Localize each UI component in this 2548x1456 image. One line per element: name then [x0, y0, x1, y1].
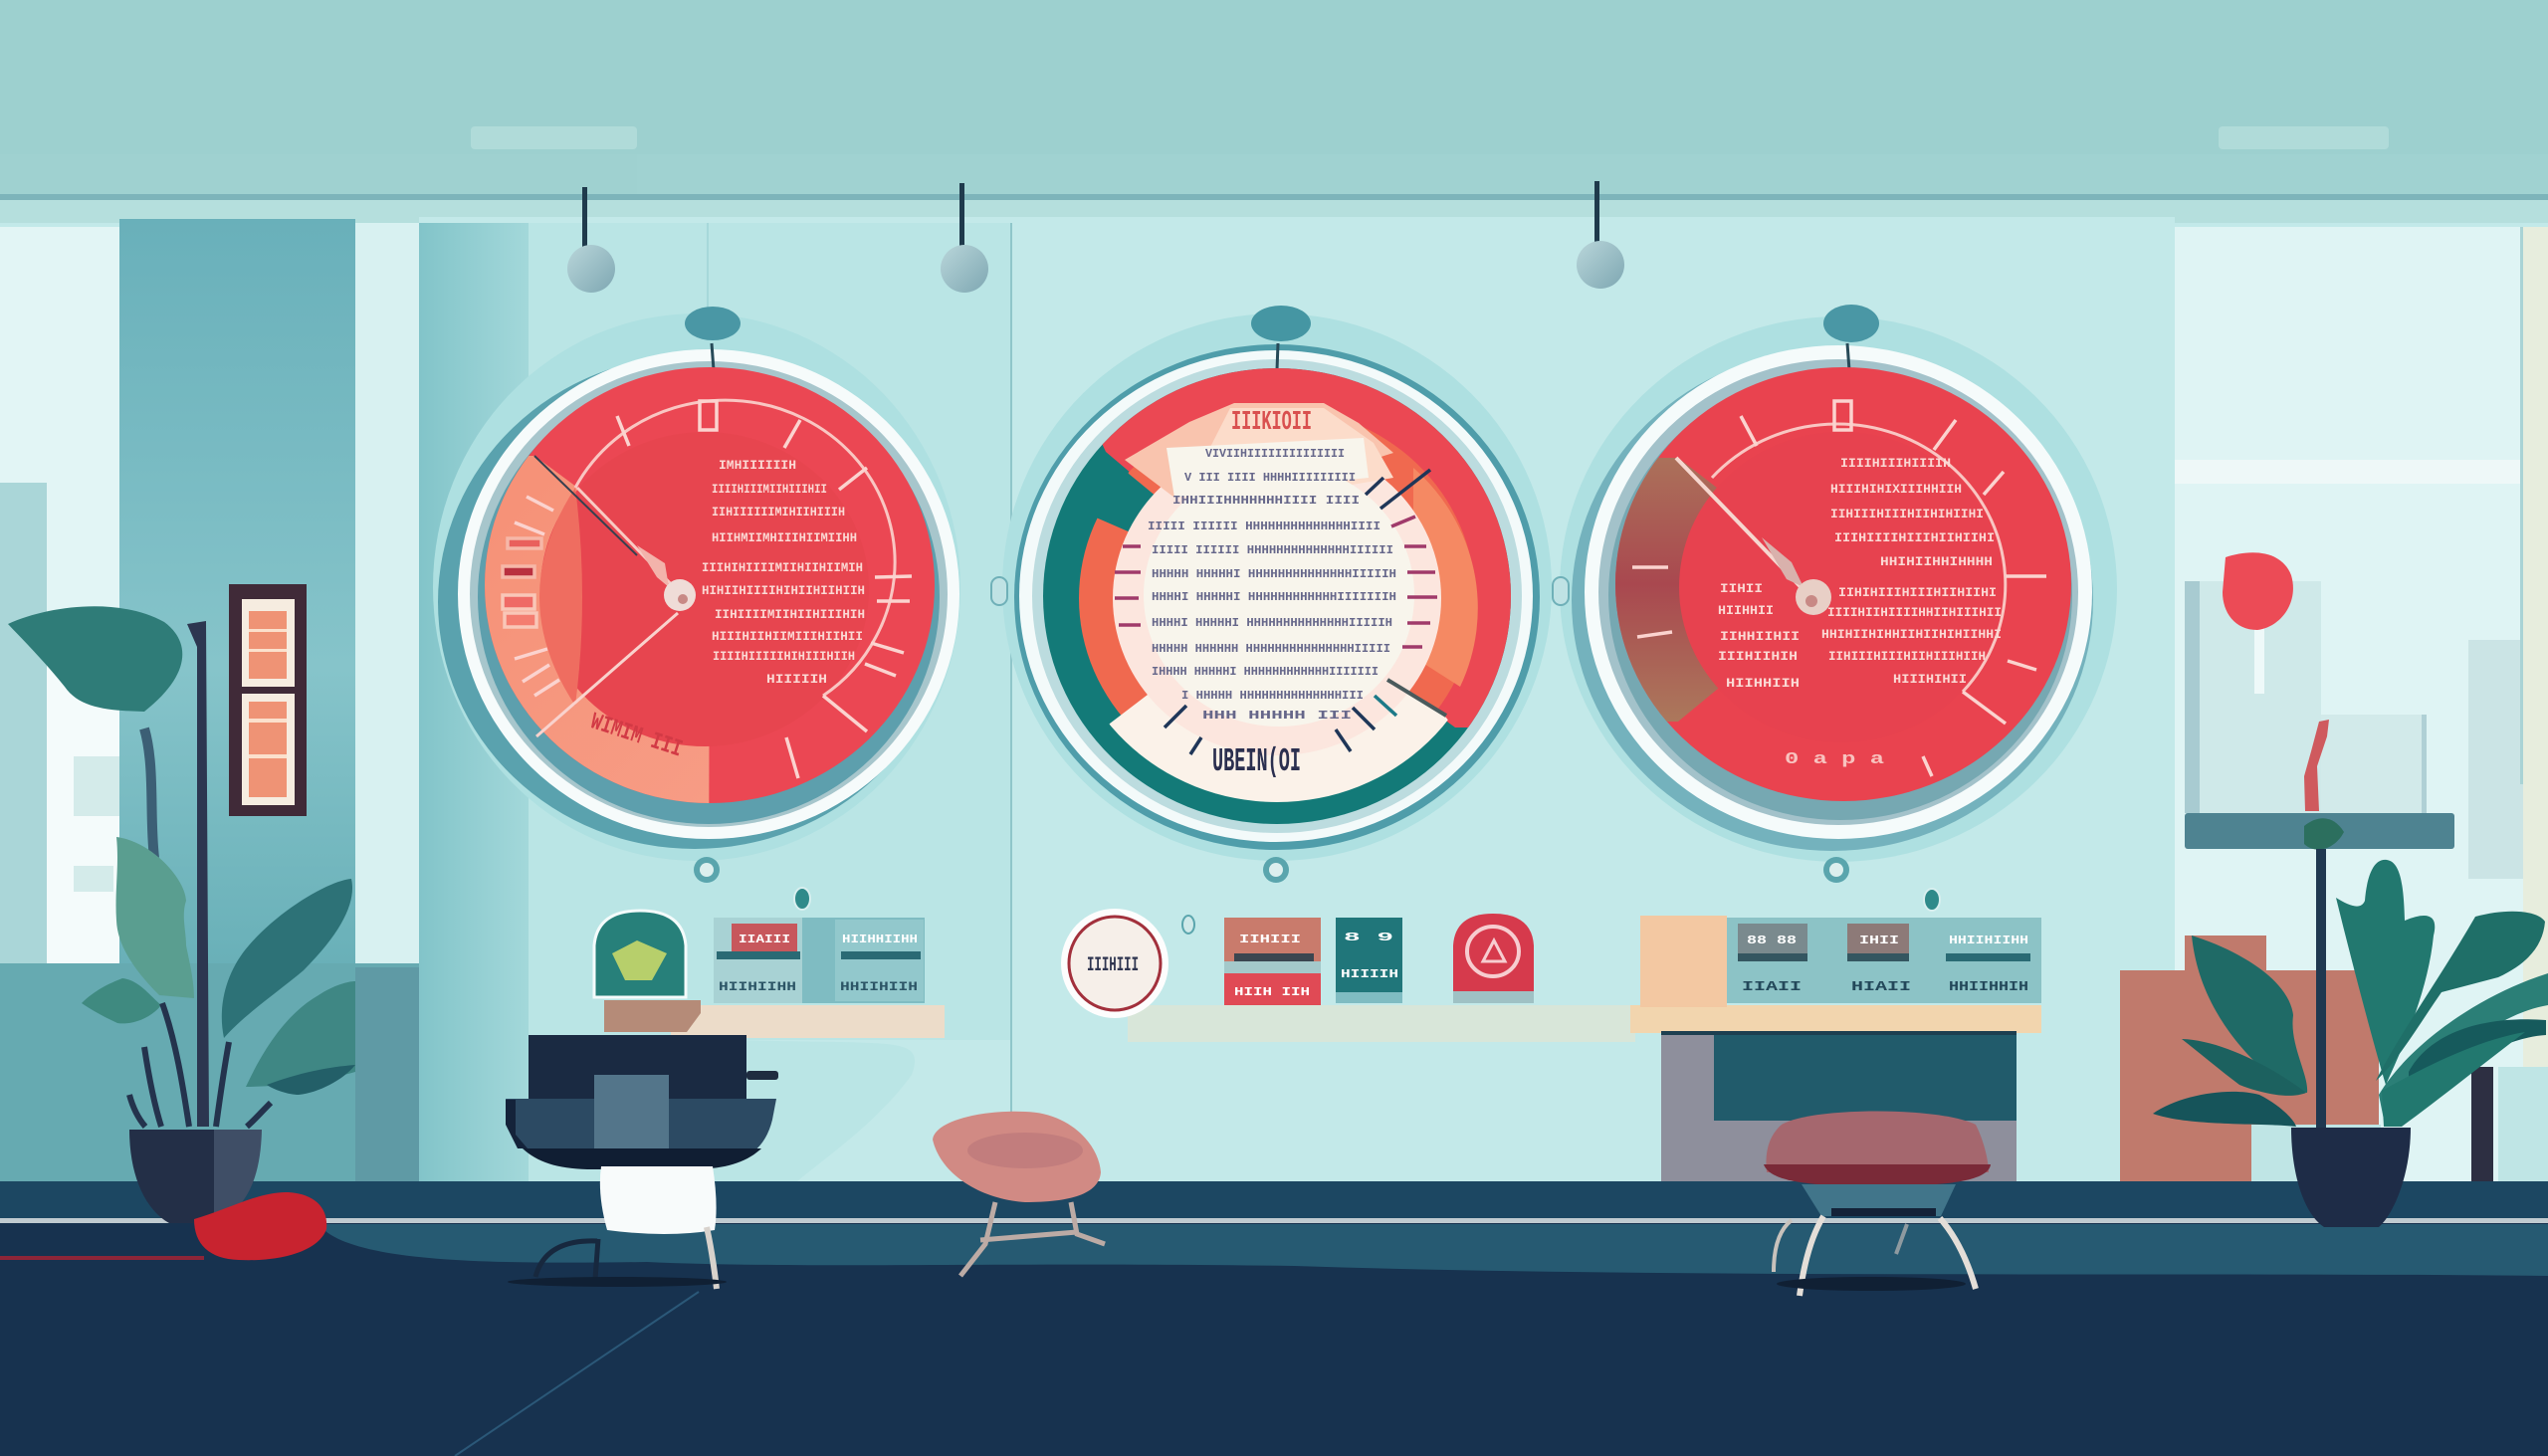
gauge 3 text block right: IIIHIIIIHIIIHIIHIIHI	[1834, 530, 1995, 545]
gauge 3 text block left: IIIHIIHIH	[1718, 649, 1798, 664]
gauge 1 casing	[433, 307, 960, 861]
red strip	[0, 1256, 204, 1260]
peach panel	[1640, 916, 1727, 1007]
gauge 1 curved label: WIMIM III	[587, 709, 686, 763]
shelf group middle	[1061, 909, 1635, 1042]
gauge 3 text block right: HHIHIIHHIHHHH	[1880, 554, 1993, 569]
red figurine	[2304, 720, 2329, 811]
info cards right: HHIIHHIH	[1949, 979, 2028, 995]
framed picture	[229, 584, 307, 816]
ceiling lamp 2	[941, 183, 988, 293]
gauge 2 screw	[1263, 857, 1289, 883]
left plant	[0, 606, 355, 1260]
shelf right	[1630, 1005, 2041, 1033]
gauge 2 text block: IIIII IIIIII HHHHHHHHHHHHHHIIII	[1148, 520, 1380, 533]
chair back	[529, 1035, 778, 1105]
floor	[0, 1181, 2548, 1456]
gauge 1 text block	[702, 458, 865, 687]
shelf on right	[2185, 813, 2454, 849]
gauge 3 text block left	[1718, 581, 1800, 691]
chair 3 seat band	[1764, 1164, 1991, 1186]
glass display box	[2185, 581, 2427, 813]
small wall markers	[794, 888, 1940, 911]
green knot	[2304, 818, 2344, 850]
light column	[355, 223, 419, 965]
gauge 2 dark ticks	[1165, 470, 1446, 754]
panel: gauge 1	[433, 307, 960, 883]
chair 3 base	[1802, 1184, 1956, 1216]
thin stem	[144, 728, 154, 858]
gauge 1 ticks	[503, 401, 912, 778]
panel: gauge 3	[1560, 305, 2117, 883]
gauge 3 text block left: HIIHHIIH	[1726, 676, 1800, 691]
small wall marker	[1182, 916, 1194, 934]
orange cabinet	[2120, 936, 2381, 1181]
info cards left	[714, 918, 925, 1003]
gauge 1 text block: HIHIIHIIIIHIHIIHIIHIIH	[702, 583, 865, 598]
gauge 2 text block: HHHHH HHHHHH HHHHHHHHHHHHHHHIIIII	[1152, 642, 1390, 656]
info cards left: HHIIHIIH	[840, 979, 918, 994]
chair 2 legs	[960, 1202, 1105, 1276]
ceiling lamp 1	[567, 187, 615, 293]
upper light leaf	[116, 837, 194, 998]
gauge 2 text block: HHHHH HHHHHI HHHHHHHHHHHHHHIIIIIH	[1152, 567, 1396, 581]
gauge 3 text block right: HHIHIIHIHHIIHIIHIHIIHHI	[1821, 627, 2002, 642]
gauge 3 text block right: IIHIHIIIHIIIHIIHIIHI	[1838, 585, 1997, 600]
gauge 1 text block: IIIIHIIIIIHIHIIIHIIH	[713, 649, 855, 664]
right low leaves	[246, 981, 355, 1087]
gauge 1 text block: HIIIIIH	[766, 672, 827, 687]
gauge 2 casing	[1002, 306, 1552, 861]
card teal	[1336, 918, 1402, 1003]
info cards right: IIAII	[1742, 979, 1802, 995]
info cards right: 88 88	[1747, 934, 1797, 947]
shelf group left	[594, 911, 945, 1038]
right plant	[2153, 720, 2548, 1227]
gauge 2 text block: HHHHI HHHHHI HHHHHHHHHHHHHHIIIIIH	[1152, 616, 1392, 630]
info cards right	[1727, 918, 2041, 1003]
gauge 2 bottom label: UBEIN(OI	[1212, 743, 1301, 780]
info cards left: HIIHIIHH	[719, 979, 796, 994]
left upper leaf	[2192, 936, 2307, 1093]
gauge 3 text block left: HIIHHII	[1718, 603, 1774, 618]
gauge 2 text block: IHHIIIHHHHHHHIIII IIII	[1172, 494, 1360, 508]
gauge 3 ticks	[1632, 401, 2046, 776]
gauge 1 text block: IIHIIIIIIMIHIIHIIIH	[712, 505, 845, 520]
gauge 2 top label: IIIKIOII	[1231, 408, 1312, 438]
gauge 3 screw	[1823, 857, 1849, 883]
gauge 2 dial	[1043, 368, 1511, 824]
red alert badge	[1453, 914, 1534, 1003]
gauge 1 screw	[694, 857, 720, 883]
round badge: IIIHIII	[1087, 954, 1139, 977]
gauge 3 text block right: IIHIIIHIIIHIIHIIIHIIH	[1828, 649, 1986, 664]
round badge	[1061, 909, 1168, 1018]
gauge 2 text block: V III IIII HHHHIIIIIIIII	[1184, 471, 1356, 485]
gauge 3 text block right: IIIIHIIIHIIIIH	[1840, 456, 1951, 471]
gauge 3 text block right: HIIIHIHIXIIIHHIIH	[1830, 482, 1962, 497]
gauge 3 bottom label: 0 a p a	[1785, 750, 1884, 769]
red round sign	[2223, 552, 2293, 694]
red blob	[194, 1192, 326, 1260]
gauge 2 text block: HHH HHHHH III	[1202, 709, 1352, 723]
chair 3 maroon	[1764, 1111, 1991, 1296]
left window	[0, 227, 119, 965]
info cards left: IIAIII	[739, 933, 790, 946]
centre leaf	[2336, 860, 2435, 1085]
white column	[600, 1166, 717, 1234]
gauge 1 text block: IIIHIHIIIIMIIHIIHIIMIH	[702, 560, 863, 575]
gauge 3 text block right: IIIIHIIHIIIIHHIIHIIIHII	[1827, 605, 2002, 620]
gauge 2 text block	[1148, 447, 1396, 723]
brown pot on shelf	[604, 1000, 701, 1032]
right upper leaves	[2376, 912, 2545, 1081]
chair legs	[508, 1227, 727, 1289]
info cards right: HIAII	[1851, 979, 1911, 995]
card red: HIIH IIH	[1234, 985, 1310, 999]
lower left leaf	[82, 978, 161, 1023]
big leaf	[8, 606, 182, 712]
chair 2 seat	[967, 1133, 1083, 1168]
right big leaf	[222, 879, 352, 1038]
green plant badge	[594, 911, 686, 997]
gauge 2 text block: IHHHH HHHHHI HHHHHHHHHHHHIIIIIII	[1152, 665, 1379, 679]
shelf group right	[1630, 916, 2041, 1181]
stems	[129, 1003, 271, 1127]
gauge 3 text block right: HIIIHIHII	[1893, 672, 1967, 687]
back wall	[419, 217, 2175, 1182]
gauge 3 text block left: IIHHIIHII	[1720, 629, 1800, 644]
gauge 1 text block: IMHIIIIIIH	[719, 458, 796, 473]
pot right	[2291, 1128, 2411, 1227]
info cards left: HIIHHIIHH	[842, 933, 918, 946]
chair 2 shell	[933, 1112, 1101, 1202]
right lowest leaf	[2382, 1032, 2525, 1127]
wall connector knobs	[991, 577, 1569, 605]
gauge 1 text block: HIIHMIIMHIIIHIIMIIHH	[712, 530, 857, 545]
tall pole	[187, 621, 209, 1127]
left mid leaf	[2182, 1039, 2306, 1096]
gauge 2 text block: VIVIIHIIIIIIIIIIIIII	[1205, 447, 1345, 461]
ceiling	[0, 0, 2548, 223]
info cards right: IHII	[1859, 934, 1899, 947]
gauge 1 needle	[534, 456, 696, 736]
right mid leaf	[2379, 973, 2548, 1120]
shelf left	[671, 1005, 945, 1038]
ceiling lamp 3	[1577, 181, 1624, 289]
gauge 2 text block: IIIII IIIIII HHHHHHHHHHHHHHIIIIII	[1152, 543, 1393, 557]
card red	[1224, 918, 1321, 1005]
gauge 3 casing	[1560, 305, 2117, 862]
info cards right: HHIIHIIHH	[1949, 934, 2028, 947]
chair 2 pink	[933, 1112, 1105, 1276]
gauge 2 text block: I HHHHH HHHHHHHHHHHHHHIII	[1181, 689, 1364, 703]
card red: IIHIII	[1239, 933, 1301, 946]
gauge 2 text block: HHHHI HHHHHI HHHHHHHHHHHHIIIIIIIH	[1152, 590, 1396, 604]
desk	[1661, 1031, 2017, 1181]
pillar	[119, 219, 355, 965]
gauge 1 text block: HIIIHIIHIIMIIIHIIHII	[712, 629, 863, 644]
dark table leg	[2471, 1067, 2493, 1182]
chair 1 black	[506, 1035, 778, 1289]
card teal: HIIIIH	[1341, 967, 1398, 981]
gauge 3 text block left: IIHII	[1720, 581, 1763, 596]
gauge 3 text block right	[1821, 456, 2002, 687]
left low leaf	[2153, 1092, 2296, 1127]
gauge 1 text block: IIHIIIIMIIHIIHIIIHIH	[715, 607, 865, 622]
pole	[2316, 849, 2326, 1130]
gauge 1 dial	[485, 367, 935, 803]
gauge 2 ticks	[1115, 517, 1437, 647]
lower left wall	[0, 963, 419, 1182]
right window	[2175, 227, 2548, 1182]
chair 3 shell	[1766, 1111, 1989, 1172]
gauge 3 dial	[1615, 367, 2071, 801]
chair seat	[506, 1075, 776, 1169]
card teal: 8 9	[1344, 931, 1393, 944]
panel: gauge 2	[1002, 306, 1552, 883]
shelf middle	[1128, 1005, 1635, 1042]
gauge 3 needle	[1676, 458, 1831, 615]
gauge 3 text block right: IIHIIIHIIIHIIHIHIIHI	[1830, 507, 1984, 521]
right dark leaves	[2409, 1019, 2546, 1095]
gauge 1 text block: IIIIHIIIMIIHIIIHII	[712, 482, 827, 497]
chair 3 legs	[1774, 1216, 1976, 1296]
pot left	[129, 1130, 262, 1223]
